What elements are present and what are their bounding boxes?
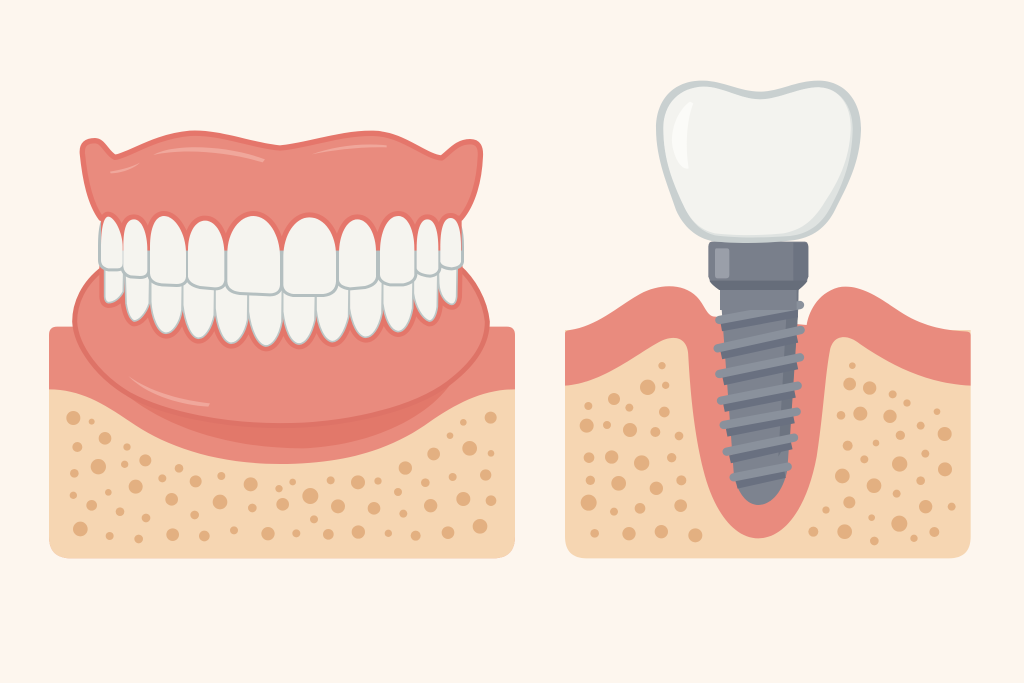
lower teeth xyxy=(105,260,457,346)
illustration: denture versus dental implant xyxy=(49,80,971,558)
gum block xyxy=(49,327,515,558)
upper teeth xyxy=(101,216,461,294)
lower denture base xyxy=(75,267,487,426)
abutment highlight xyxy=(715,248,729,278)
threads xyxy=(718,305,801,477)
bone block xyxy=(49,389,515,558)
panel: denture on gum and bone xyxy=(49,133,515,558)
crown xyxy=(656,81,861,243)
crown highlight xyxy=(672,102,693,169)
screw body xyxy=(720,287,799,505)
highlights on upper denture xyxy=(153,147,265,162)
bone block xyxy=(565,330,971,558)
upper denture base xyxy=(82,133,480,247)
gum around implant xyxy=(565,286,971,538)
implant screw xyxy=(718,287,801,505)
denture pressure shadow on gum xyxy=(107,377,453,448)
highlight on lower denture xyxy=(128,376,210,407)
panel: implant in gum and bone xyxy=(565,81,971,558)
abutment xyxy=(708,242,808,310)
bone pores xyxy=(66,411,497,543)
thread shadows xyxy=(721,313,797,485)
bone pores xyxy=(580,362,956,545)
